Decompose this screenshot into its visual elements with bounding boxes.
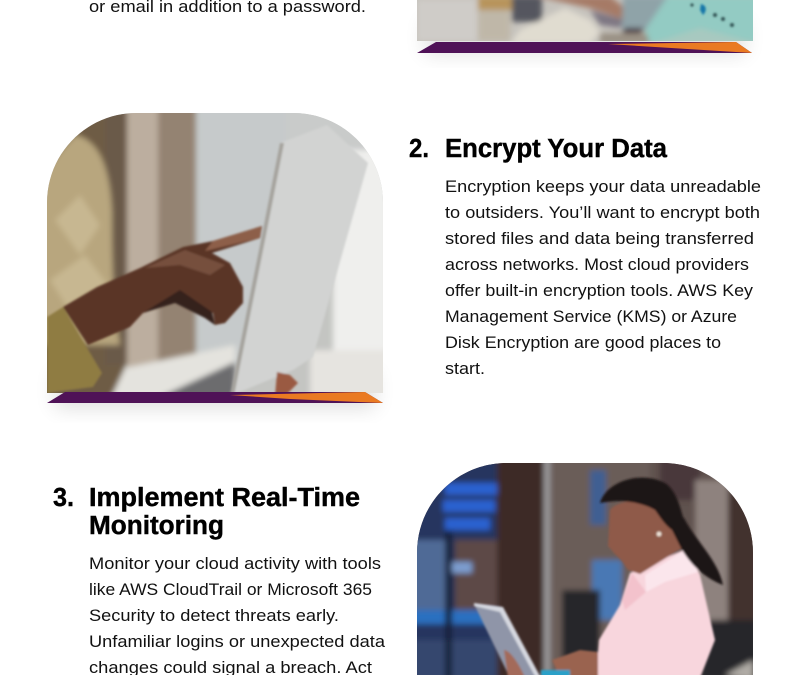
body text: monitoring: Monitor your cloud activity with tools — [89, 555, 381, 573]
body text: encryption: across networks. Most cloud providers — [445, 256, 749, 274]
soft shadow under photo 2 — [55, 372, 375, 408]
body text: encryption: Management Service (KMS) or Azure — [445, 308, 737, 326]
soft shadow under photo 1 — [425, 20, 745, 54]
heading: Encrypt Your Data: Encrypt Your Data — [445, 135, 668, 163]
tablet — [474, 604, 541, 675]
body text: encryption: Disk Encryption are good places to — [445, 334, 721, 352]
body text: encryption — [445, 178, 761, 378]
photo 2: hand pointing at a tablet — [40, 105, 388, 400]
heading: Implement Real-Time Monitoring — [89, 484, 360, 540]
hair — [600, 478, 723, 585]
heading: Implement Real-Time Monitoring: Monitoring — [89, 512, 224, 540]
ribbon under photo 2 — [47, 392, 383, 403]
heading: Implement Real-Time Monitoring: Implement Real-Time — [89, 484, 360, 512]
earring — [657, 532, 661, 536]
body text: monitoring — [89, 555, 386, 675]
photo 3: woman with a tablet in a server room — [410, 455, 758, 675]
body text: encryption: offer built-in encryption tools. AWS Key — [445, 282, 754, 300]
body text: monitoring: like AWS CloudTrail or Microsoft 365 — [89, 581, 372, 599]
ribbon under photo 1 — [417, 42, 752, 53]
step number 3: 3. — [53, 484, 74, 512]
shirt — [596, 548, 715, 675]
body text: encryption: start. — [445, 360, 485, 378]
photo 1: blurred desk with laptop — [417, 0, 760, 44]
body text: monitoring: Unfamiliar logins or unexpected data — [89, 633, 386, 651]
hands — [504, 650, 525, 675]
step number 2: 2. — [409, 135, 429, 163]
neck and face — [608, 501, 682, 574]
body text: encryption: Encryption keeps your data unreadable — [445, 178, 761, 196]
section 3: real-time monitoring — [53, 455, 758, 675]
body text: encryption: to outsiders. You’ll want to encrypt both — [445, 204, 760, 222]
body text: monitoring: Security to detect threats early. — [89, 607, 339, 625]
section 2: encrypt your data — [40, 105, 761, 408]
body text: encryption: stored files and data being transferred — [445, 230, 754, 248]
section 1: end of first step — [89, 0, 760, 54]
